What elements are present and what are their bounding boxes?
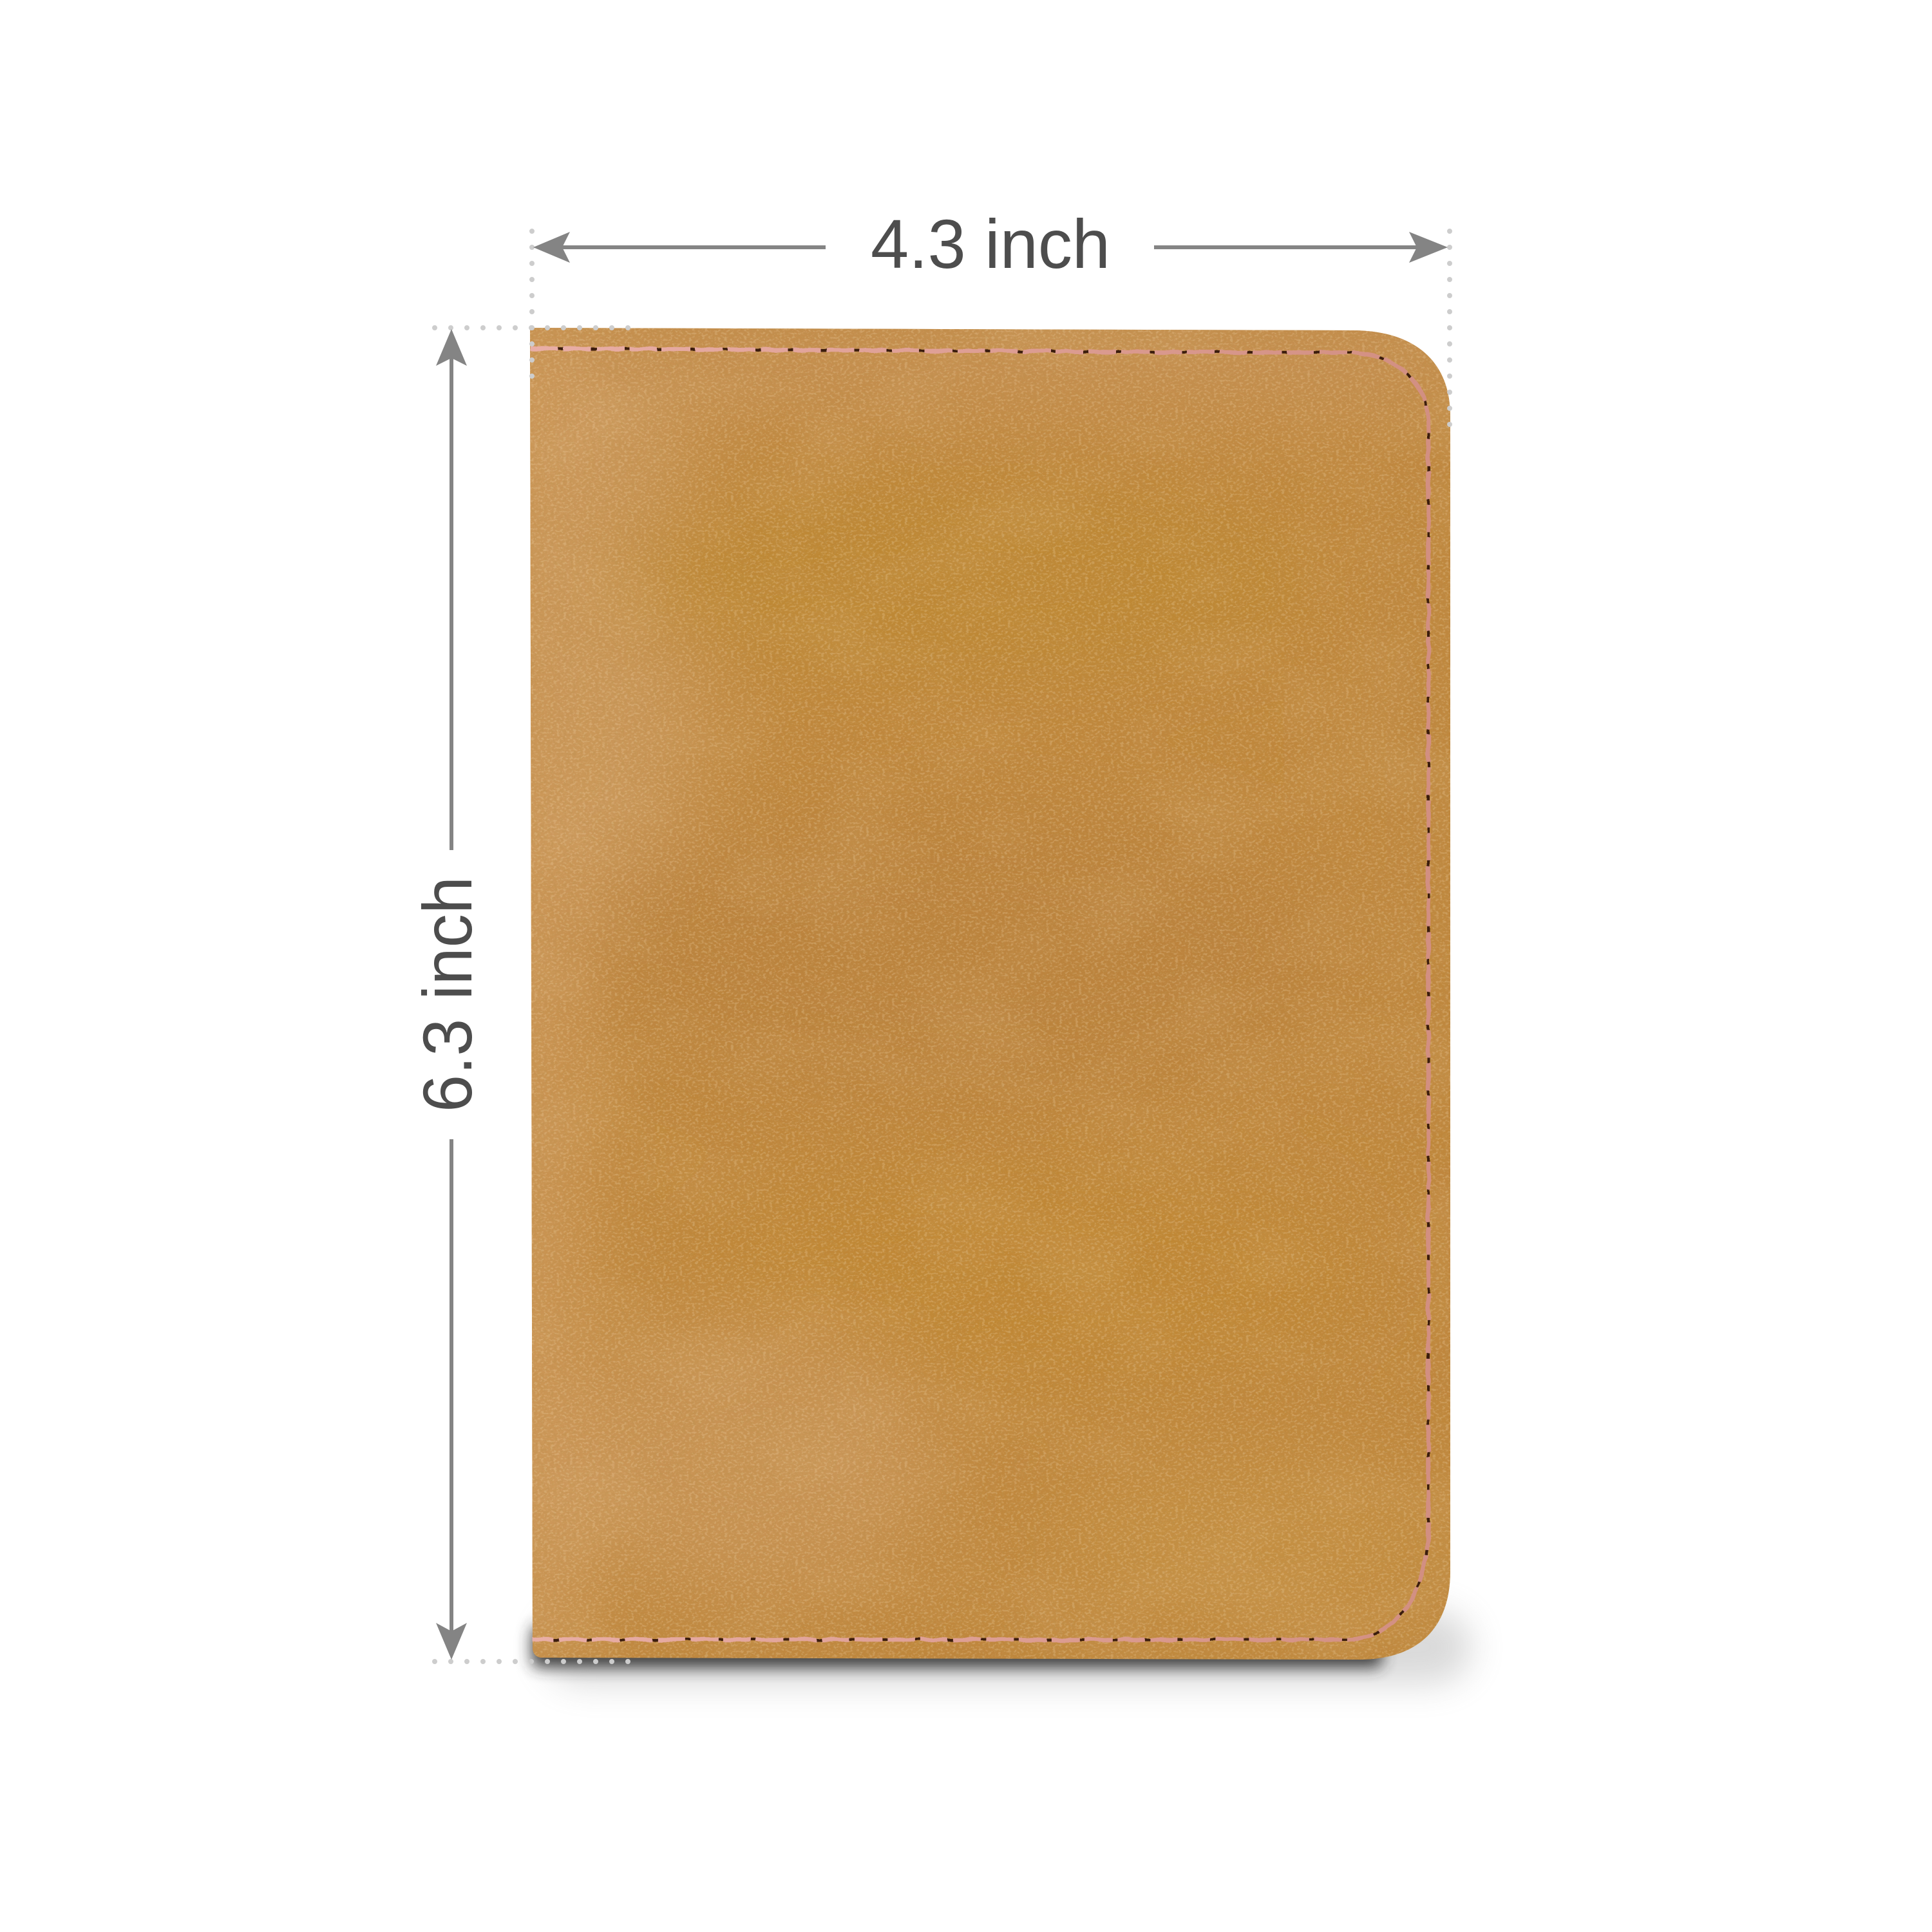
drop shadow under wallet bbox=[532, 1610, 1472, 1684]
infographic: wallet dimensions bbox=[421, 218, 1480, 1696]
dotted guide: bottom horizontal bbox=[435, 1659, 631, 1664]
dotted guide: top left vertical bbox=[529, 231, 535, 380]
arrow: height top bbox=[436, 329, 467, 850]
arrow: height bottom bbox=[436, 1139, 467, 1660]
dotted guide: top right vertical bbox=[1447, 231, 1452, 428]
label: width: 4.3 inch bbox=[871, 205, 1110, 283]
wallet stitching bbox=[531, 348, 1428, 1640]
leather mottling bbox=[821, 439, 1409, 1284]
arrow: width left bbox=[533, 232, 826, 263]
leather grain bbox=[515, 316, 1468, 1674]
arrow: width right bbox=[1154, 232, 1448, 263]
wallet: tan leather cover bbox=[489, 303, 1468, 1674]
leather tonal patches bbox=[489, 303, 1468, 1674]
dotted guide: top horizontal bbox=[435, 325, 631, 330]
label: height: 6.3 inch bbox=[408, 876, 486, 1112]
leather base colour bbox=[515, 316, 1468, 1674]
